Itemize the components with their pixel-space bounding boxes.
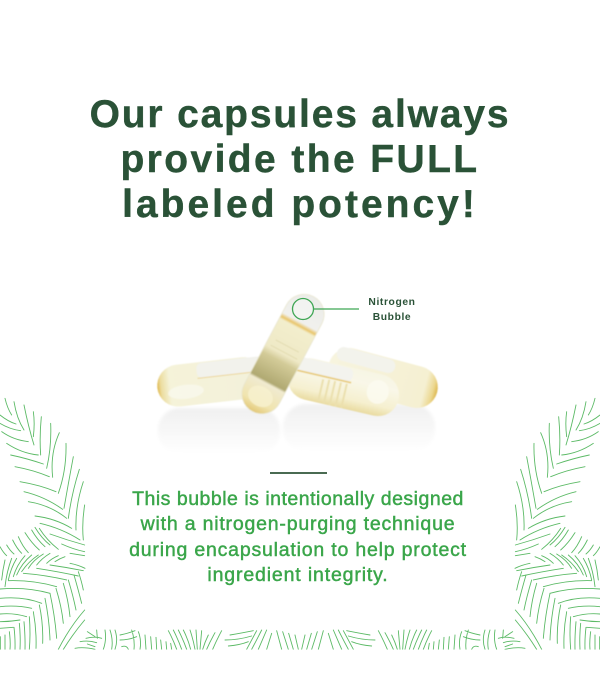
title [90,92,510,226]
title: Our capsules always [90,92,510,136]
standing capsule [235,287,331,421]
callout label: Nitrogen Bubble: Bubble [373,312,411,323]
reflections [158,404,435,454]
callout label: Nitrogen Bubble: Nitrogen [368,297,416,308]
divider [270,472,327,474]
body text [129,488,467,586]
body text: ingredient integrity. [207,564,389,586]
body text: with a nitrogen-purging technique [141,513,455,535]
right leaf pattern [302,398,600,649]
left capsule [155,355,267,409]
middle right capsule [284,354,403,420]
body text: This bubble is intentionally designed [132,488,464,510]
leaf pattern background [0,398,600,650]
left leaf pattern [0,398,298,649]
right back capsule [323,343,443,413]
callout label: Nitrogen Bubble [368,297,416,323]
title: provide the FULL [120,138,480,180]
body text: during encapsulation to help protect [129,539,467,561]
nitrogen bubble callout marker [292,298,359,320]
title: labeled potency! [122,182,478,226]
